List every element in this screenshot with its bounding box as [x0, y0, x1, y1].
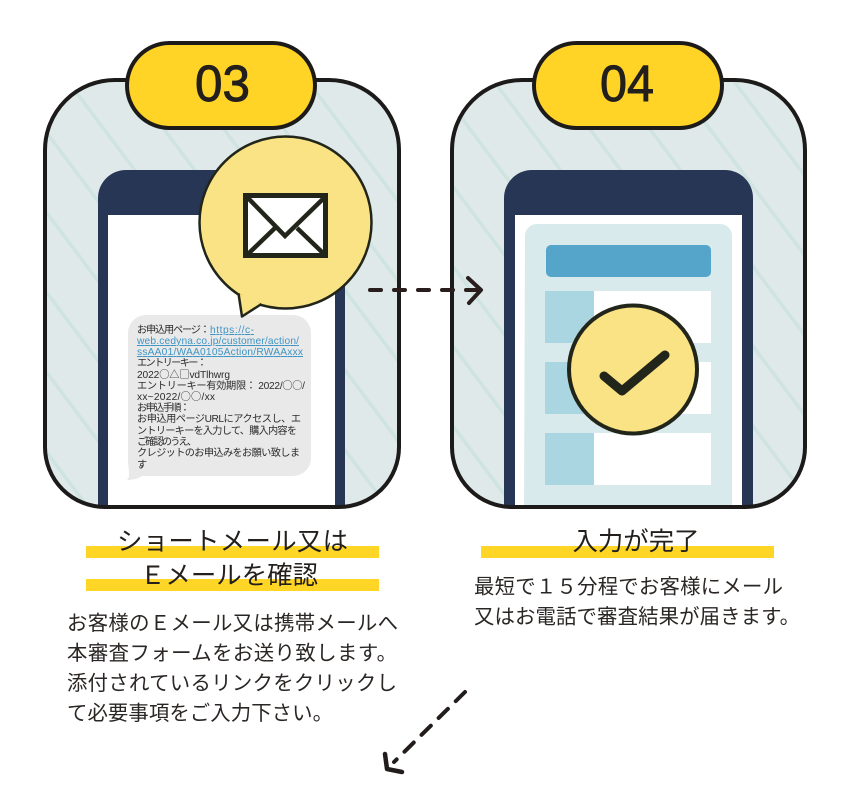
arrow: to next row [385, 692, 465, 772]
sms message: エントリーキー： [137, 358, 207, 369]
sms message: お申込手順： [137, 401, 190, 414]
sms message: 2022○△□vdTlhwrg [137, 366, 230, 381]
sms message: お申込用ページURLにアクセスし、エ [137, 412, 301, 425]
panel outline [452, 80, 805, 507]
form card [524, 224, 732, 506]
text block: step 04 description: 又はお電話で審査結果が届きます。 [474, 606, 800, 628]
text block: step 03 description: 添付されているリンクをクリックし [67, 672, 397, 695]
panel background [45, 80, 399, 507]
heading: step 04: 入力が完了 [572, 528, 700, 556]
panel outline [45, 80, 399, 507]
form row 3 [545, 433, 711, 485]
form header bar [546, 245, 711, 277]
panel background [452, 80, 805, 507]
number badge 03 [127, 43, 315, 128]
sms message [127, 315, 311, 480]
text block: step 03 description: て必要事項をご入力下さい。 [67, 702, 333, 725]
arrow: step 03 to 04 [370, 278, 481, 303]
text block: step 03 description [67, 612, 398, 725]
panel: step 03 [43, 41, 401, 509]
text block: step 03 description: 本審査フォームをお送り致します。 [67, 642, 397, 665]
heading: step 04 [481, 528, 774, 558]
form row 1 [545, 291, 711, 343]
number badge 04 [534, 43, 722, 128]
heading: step 03: ショートメール又は [117, 528, 348, 556]
sms message: xx~2022/○○/xx [137, 388, 215, 403]
sms message: す。 [137, 459, 149, 471]
text block: step 03 description: お客様のＥメール又は携帯メールへ [67, 612, 398, 635]
sms message: ントリーキーを入力して、購入内容を [137, 424, 297, 437]
sms message: エントリーキー有効期限： 2022/○○/ [137, 377, 305, 392]
sms message: https://c- [210, 325, 254, 336]
heading: step 03: Ｅメールを確認 [140, 562, 318, 590]
icon: mail speech bubble [200, 136, 372, 316]
sms message: クレジットのお申込みをお願い致しま [137, 446, 300, 459]
text block: step 04 description: 最短で１５分程でお客様にメール [474, 576, 783, 598]
sms message: ご確認のうえ、 [137, 435, 197, 448]
sms message: お申込用ページ： [137, 323, 210, 336]
icon: check circle [569, 306, 697, 434]
phone [504, 170, 753, 510]
sms message: ssAA01/WAA0105Action/RWAAxxx [137, 347, 303, 358]
heading: step 03 [86, 528, 379, 591]
number badge 04: 04 [600, 55, 654, 112]
form row 2 [545, 362, 711, 414]
number badge 03: 03 [195, 55, 250, 112]
highlight bars [86, 546, 379, 591]
highlight bar [481, 546, 774, 558]
sms message: web.cedyna.co.jp/customer/action/ [136, 336, 299, 347]
phone [98, 170, 345, 510]
panel: step 04 [450, 41, 807, 509]
text block: step 04 description [474, 576, 800, 628]
